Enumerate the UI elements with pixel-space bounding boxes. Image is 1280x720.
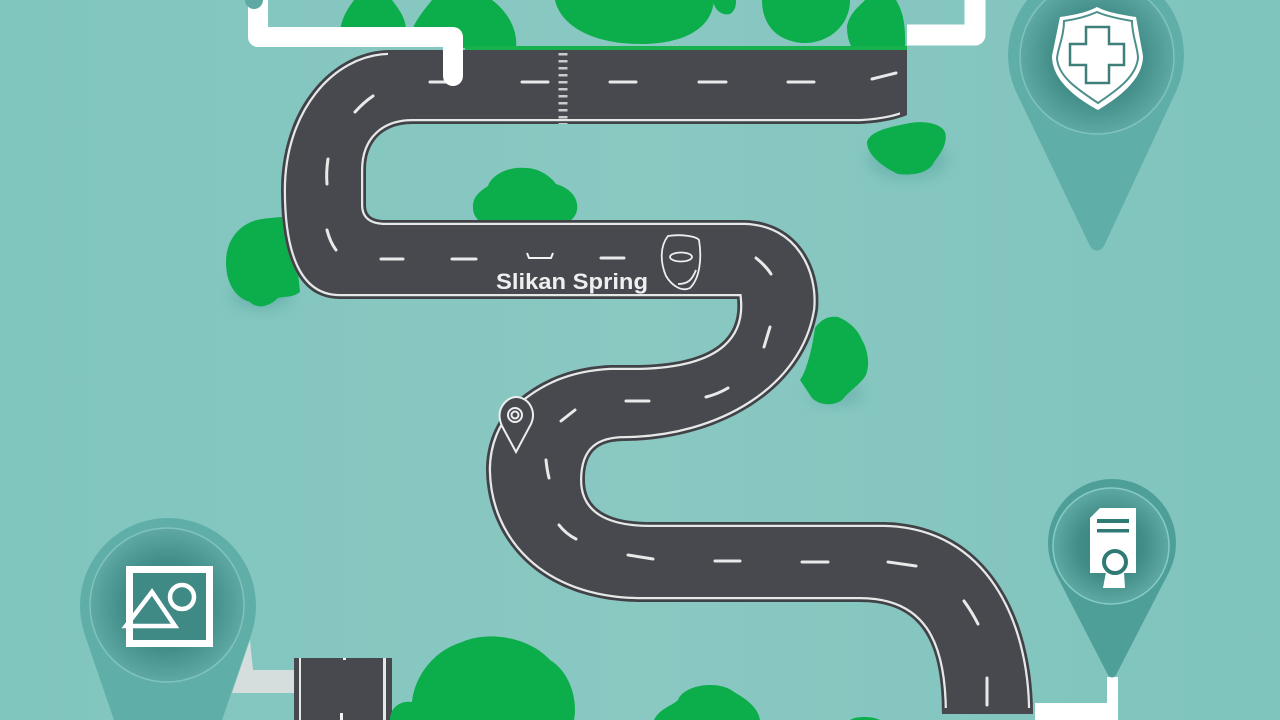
crosswalk on top road xyxy=(558,53,568,124)
pin body xyxy=(1018,95,1174,250)
icon: picture frame xyxy=(126,570,210,644)
grey connector bottom left xyxy=(232,640,294,693)
pin disc xyxy=(1053,488,1169,604)
icon: road location pin xyxy=(500,397,533,452)
pin body xyxy=(1056,574,1168,678)
white connector top right xyxy=(907,0,975,35)
icon: shield with cross xyxy=(1052,7,1143,110)
icon: certificate xyxy=(1090,508,1136,588)
pin disc xyxy=(90,528,244,682)
panel: shield pin xyxy=(1008,0,1184,250)
tree above middle road xyxy=(473,168,577,224)
bottom road stub xyxy=(294,658,392,720)
centre lane dashes xyxy=(327,73,987,705)
small mark on road xyxy=(527,253,553,258)
trees along bottom edge xyxy=(390,636,880,720)
white connector top left xyxy=(258,0,453,76)
white connector bottom right xyxy=(1035,677,1118,720)
trees along top edge xyxy=(340,0,907,51)
tree left of road xyxy=(226,214,300,310)
panel: image pin xyxy=(80,518,256,720)
winding road xyxy=(281,46,1036,716)
pin disc xyxy=(1020,0,1174,134)
icon: oval road emblem xyxy=(662,235,700,289)
tree right of top road xyxy=(867,122,948,180)
connector node xyxy=(245,0,263,9)
pin body xyxy=(85,634,251,720)
panel: certificate pin xyxy=(1048,479,1176,678)
tree right of winding road xyxy=(800,317,868,406)
road label: Slikan Spring xyxy=(496,269,648,294)
